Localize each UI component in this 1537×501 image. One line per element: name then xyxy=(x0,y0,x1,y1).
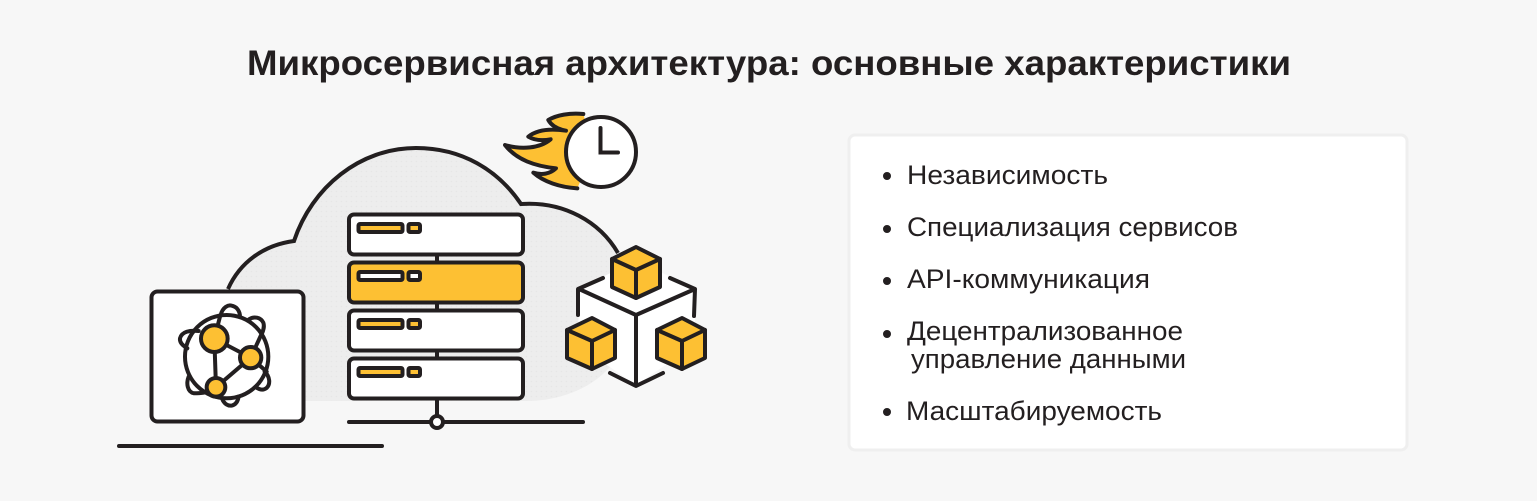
icon: server rack xyxy=(349,214,583,428)
list item: API: API-коммуникация xyxy=(907,264,1150,294)
list item: scalability: Масштабируемость xyxy=(906,396,1162,426)
icon: burning clock xyxy=(505,114,636,188)
server 2 xyxy=(349,262,523,302)
illustration: cloud with services xyxy=(119,114,705,446)
network node xyxy=(431,416,443,428)
server 3 xyxy=(349,310,523,350)
server 4 xyxy=(349,358,523,398)
icon: globe network xyxy=(180,305,269,406)
icon: network panel xyxy=(152,292,304,422)
icon: cubes xyxy=(567,247,705,386)
list item: decentralized data: Децентрализованное xyxy=(907,316,1183,346)
list item: specialization: Специализация сервисов xyxy=(907,212,1238,242)
large outline cube xyxy=(578,260,695,386)
title: Микросервисная архитектура: основные характеристики xyxy=(247,43,1291,83)
top cube xyxy=(612,247,660,298)
right cube xyxy=(657,318,705,369)
network line xyxy=(349,420,583,424)
left cube xyxy=(567,318,615,369)
list item: decentralized data: управление данными xyxy=(911,344,1186,374)
server 1 xyxy=(349,214,523,254)
panel: characteristics list xyxy=(849,135,1407,450)
list item: decentralized data xyxy=(883,316,1186,374)
panel base line xyxy=(119,444,382,448)
list item: independence: Независимость xyxy=(907,160,1108,190)
cloud xyxy=(228,148,650,401)
